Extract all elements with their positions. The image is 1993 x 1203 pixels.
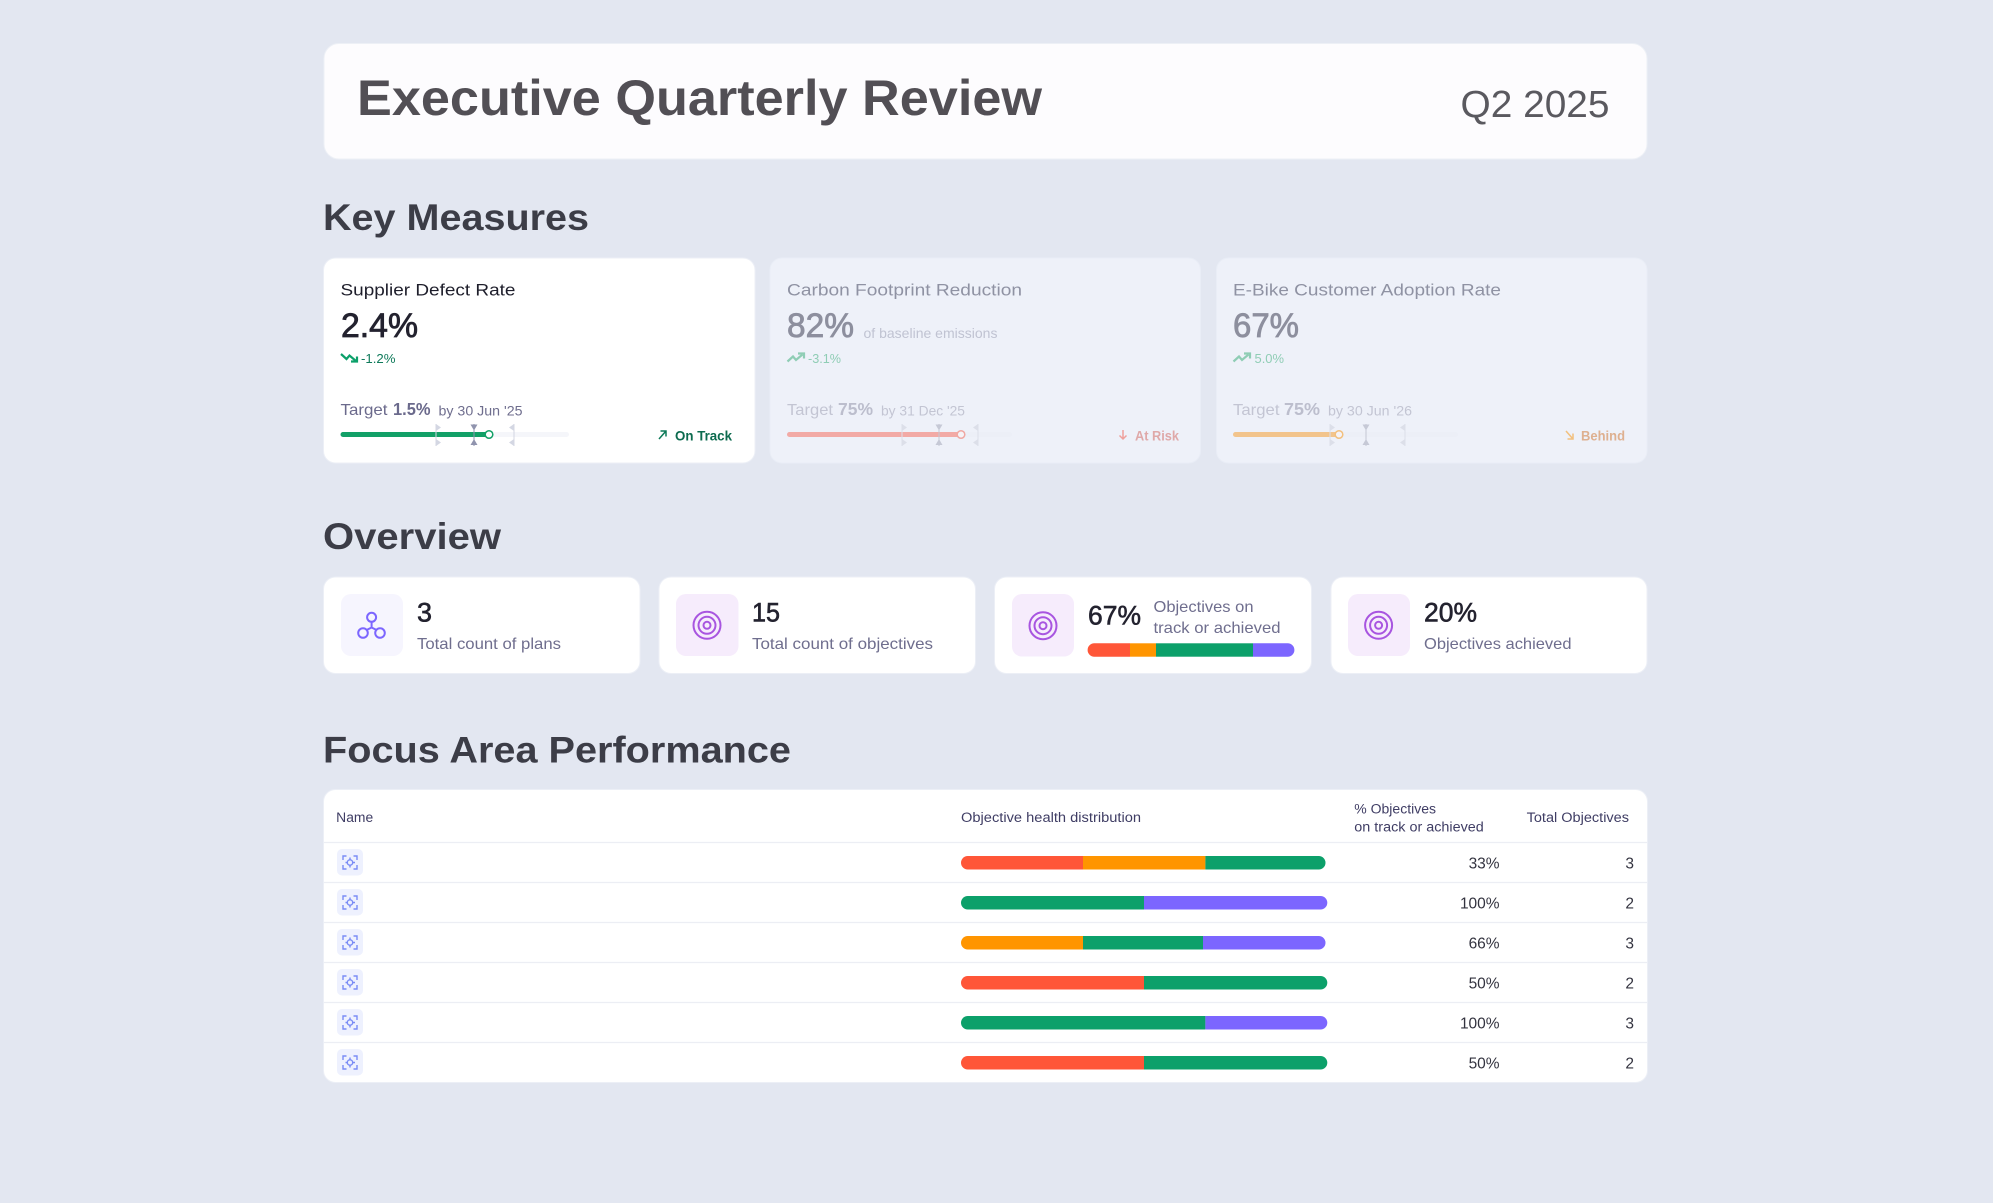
- icon: target: [1348, 594, 1410, 656]
- heading: focus area performance: Focus Area Performance: [323, 730, 791, 771]
- table row 6: 50%: [1469, 1056, 1500, 1073]
- table row 1: 3: [1625, 856, 1634, 873]
- target line: 1.5%: [393, 399, 431, 419]
- progress track: [787, 424, 1012, 446]
- target line: 75%: [838, 399, 873, 419]
- stat value: 15: [752, 598, 780, 628]
- target line: Target: [1233, 402, 1280, 419]
- heading: overview: Overview: [323, 516, 501, 557]
- table row 1: 33%: [1469, 856, 1500, 873]
- trend value: -3.1%: [808, 351, 841, 366]
- panel: header: [324, 44, 1647, 159]
- target line: [787, 399, 965, 419]
- table row 2: 100%: [1460, 896, 1500, 913]
- icon: target: [1012, 594, 1074, 656]
- status: behind: Behind: [1581, 429, 1625, 444]
- metric value: 2.4%: [341, 307, 418, 345]
- table row 2: [337, 889, 1634, 916]
- panel: objectives achieved: [1331, 577, 1647, 674]
- panel: e-bike customer adoption rate: [1216, 258, 1647, 463]
- target line: Target: [787, 402, 834, 419]
- target line: by 30 Jun '25: [438, 404, 522, 419]
- heading: key measures: Key Measures: [323, 197, 589, 238]
- table row 3: [337, 929, 1634, 956]
- target line: [340, 399, 522, 419]
- icon: trend up: [788, 354, 804, 362]
- target line: Target: [340, 402, 388, 419]
- table row 4: 50%: [1469, 976, 1500, 993]
- target line: by 30 Jun '26: [1328, 404, 1412, 419]
- table header: Name: [336, 810, 373, 825]
- stat label: Total count of objectives: [752, 636, 933, 653]
- metric unit: of baseline emissions: [864, 325, 998, 341]
- title: Executive Quarterly Review: [357, 70, 1042, 126]
- table header: Objective health distribution: [961, 810, 1141, 825]
- metric title: Carbon Footprint Reduction: [787, 281, 1022, 300]
- panel: supplier defect rate: [324, 258, 755, 463]
- panel: total objectives: [659, 577, 976, 674]
- status: at risk: At Risk: [1135, 429, 1179, 444]
- icon: target: [676, 594, 738, 656]
- table header: Total Objectives: [1527, 810, 1629, 825]
- target line: [1233, 399, 1412, 419]
- table row 4: [337, 969, 1634, 996]
- target line: by 31 Dec '25: [881, 404, 965, 419]
- panel: carbon footprint reduction: [770, 258, 1200, 463]
- table row 2: 2: [1625, 896, 1634, 913]
- stat label: [1154, 599, 1280, 637]
- table row 1: [337, 849, 1634, 876]
- panel: focus area table: [324, 790, 1648, 1082]
- metric title: Supplier Defect Rate: [340, 281, 516, 300]
- metric title: E-Bike Customer Adoption Rate: [1233, 281, 1501, 300]
- status: on track: On Track: [675, 429, 732, 444]
- trend value: 5.0%: [1254, 351, 1284, 366]
- icon: trend up: [1234, 354, 1250, 362]
- trend value: -1.2%: [361, 351, 396, 366]
- table row 5: [337, 1009, 1634, 1036]
- table header: [336, 801, 1629, 834]
- stat value: 20%: [1424, 598, 1477, 628]
- stat label: track or achieved: [1154, 620, 1280, 637]
- stat value: 3: [417, 598, 432, 628]
- table row 6: [337, 1049, 1634, 1076]
- table header: % Objectives: [1354, 801, 1436, 816]
- table header: on track or achieved: [1354, 819, 1484, 834]
- panel: objectives on track or achieved: [994, 577, 1312, 674]
- metric value: 82%: [787, 307, 854, 345]
- period label: Q2 2025: [1460, 84, 1610, 126]
- metric value: 67%: [1233, 307, 1299, 345]
- stat label: Total count of plans: [417, 636, 561, 653]
- table row 6: 2: [1625, 1056, 1634, 1073]
- table row 5: 100%: [1460, 1016, 1500, 1033]
- stat value: 67%: [1088, 600, 1141, 630]
- table row 3: 3: [1625, 936, 1634, 953]
- target line: 75%: [1284, 399, 1320, 419]
- icon: trend down: [341, 354, 357, 362]
- progress track: [340, 424, 569, 446]
- health bar: [1088, 643, 1294, 657]
- table row 4: 2: [1625, 976, 1634, 993]
- stat label: Objectives on: [1154, 599, 1254, 616]
- panel: total plans: [324, 577, 640, 674]
- stat label: Objectives achieved: [1424, 636, 1572, 653]
- progress track: [1233, 424, 1458, 446]
- icon: plans: [341, 594, 403, 656]
- table row 3: 66%: [1469, 936, 1500, 953]
- table row 5: 3: [1625, 1016, 1634, 1033]
